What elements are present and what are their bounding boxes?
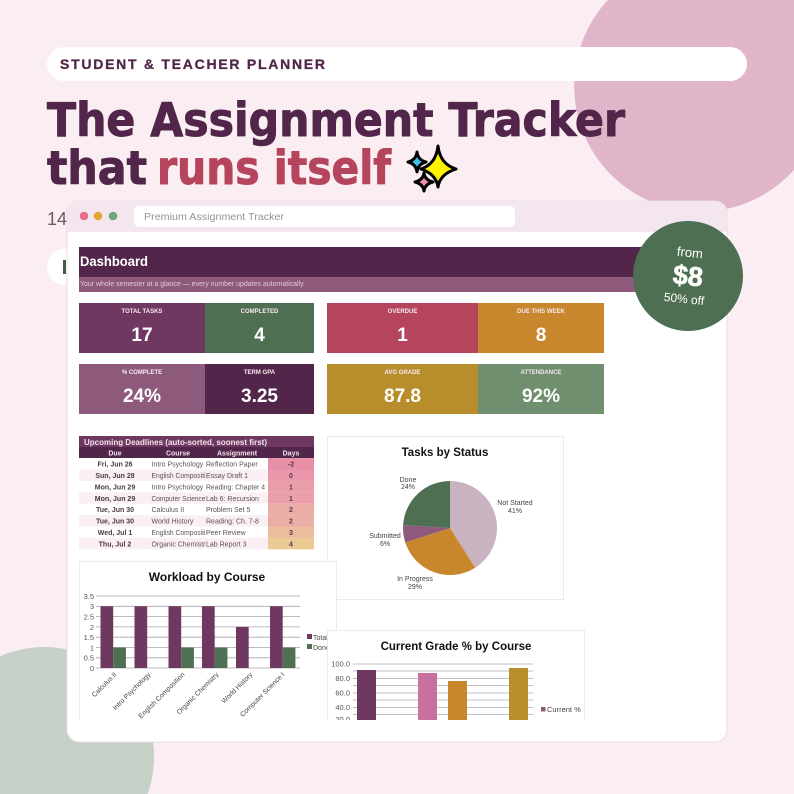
deadlines table: Mon, Jun 29 xyxy=(95,496,135,503)
KPI: average grade xyxy=(327,364,478,414)
bar chart: current grade by course: 100.0 xyxy=(331,660,350,668)
deadlines table: 2 xyxy=(289,507,293,514)
KPI: percent complete: % COMPLETE xyxy=(122,370,162,376)
bar chart: current grade by course: Current % xyxy=(547,705,581,714)
deadlines table: Sun, Jun 28 xyxy=(95,473,135,480)
window toolbar xyxy=(67,201,727,232)
deadlines table: Lab Report 3 xyxy=(206,541,247,548)
pie chart: tasks by status: 6% xyxy=(380,541,390,548)
deadlines table: English Compositi xyxy=(152,530,206,537)
dashboard banner: Your whole semester at a glance — every number updates automatically. xyxy=(80,281,305,288)
deadlines table: Reading: Ch. 7-8 xyxy=(206,519,259,526)
title: runs itself xyxy=(157,141,392,195)
bar chart: workload by course: 0 xyxy=(90,664,94,673)
eyebrow pill xyxy=(47,47,747,81)
KPI: attendance: ATTENDANCE xyxy=(521,370,561,376)
KPI: term GPA: TERM GPA xyxy=(244,370,276,376)
bar chart: workload by course: 0.5 xyxy=(84,654,94,662)
dashboard banner xyxy=(79,247,679,292)
deadlines table: Problem Set 5 xyxy=(206,507,250,514)
partly hidden stat text: 14 xyxy=(47,209,67,229)
deadlines table: World History xyxy=(152,519,194,526)
bar chart: workload by course: Intro Psychology xyxy=(112,671,153,712)
window toolbar: Premium Assignment Tracker xyxy=(144,211,284,223)
deadlines table: Essay Draft 1 xyxy=(206,473,248,480)
KPI: completed xyxy=(205,303,314,353)
deadlines table: 4 xyxy=(289,541,293,548)
deadlines table: Reading: Chapter 4 xyxy=(206,484,265,491)
KPI: completed: COMPLETED xyxy=(241,309,279,315)
price badge: $8 xyxy=(671,260,705,292)
pie chart: tasks by status: Not Started xyxy=(497,500,533,507)
bar chart: workload by course: Workload by Course xyxy=(149,570,266,584)
bar chart: workload by course: Organic Chemistry xyxy=(176,671,221,716)
bar chart: workload by course: 3 xyxy=(90,602,94,611)
title: The Assignment Tracker xyxy=(47,93,625,147)
title xyxy=(47,93,625,195)
deadlines table: Assignment xyxy=(217,450,258,458)
bar chart: workload by course xyxy=(80,562,336,730)
deadlines table xyxy=(79,436,314,549)
KPI: average grade: AVG GRADE xyxy=(385,370,420,376)
bar chart: workload by course: Calculus II xyxy=(91,671,118,699)
KPI: due this week: DUE THIS WEEK xyxy=(517,309,566,315)
KPI: total tasks: TOTAL TASKS xyxy=(122,309,162,315)
icon: sparkles xyxy=(408,146,456,191)
eyebrow pill: STUDENT & TEACHER PLANNER xyxy=(60,56,325,72)
deadlines table: Lab 6: Recursion xyxy=(206,496,259,503)
deadlines table: 1 xyxy=(289,496,293,503)
deadlines table: Upcoming Deadlines (auto-sorted, soonest first) xyxy=(84,437,267,447)
KPI: overdue: 1 xyxy=(397,325,408,346)
KPI: average grade: 87.8 xyxy=(384,386,421,407)
KPI: term GPA: 3.25 xyxy=(241,386,278,407)
pie chart: tasks by status xyxy=(328,436,564,600)
title: that xyxy=(47,141,147,195)
deadlines table: 0 xyxy=(289,473,293,480)
deadlines table: Fri, Jun 26 xyxy=(97,462,133,468)
KPI: attendance: 92% xyxy=(522,386,560,407)
partly hidden button xyxy=(47,249,107,285)
KPI: term GPA xyxy=(205,364,314,414)
bar chart: current grade by course: 40.0 xyxy=(335,703,350,712)
KPI: completed: 4 xyxy=(254,325,265,346)
bar chart: current grade by course: 60.0 xyxy=(335,688,350,698)
KPI: overdue: OVERDUE xyxy=(388,309,417,315)
deadlines table: Intro Psychology xyxy=(152,462,204,468)
deadlines table: English Compositi xyxy=(152,473,206,480)
deadlines table: Computer Science xyxy=(152,496,206,503)
deadlines table: Due xyxy=(108,450,122,458)
pie chart: tasks by status: 29% xyxy=(408,584,422,591)
bar chart: current grade by course xyxy=(327,630,585,720)
KPI: attendance xyxy=(478,364,604,414)
pie chart: tasks by status: In Progress xyxy=(397,576,433,583)
pie chart: tasks by status: Submitted xyxy=(369,533,401,540)
deadlines table: Organic Chemistr xyxy=(152,541,206,548)
decorative circle: top right xyxy=(574,0,794,212)
bar chart: workload by course: English Composition xyxy=(138,671,187,720)
KPI: overdue xyxy=(327,303,478,353)
KPI: due this week: 8 xyxy=(536,325,546,346)
deadlines table: Tue, Jun 30 xyxy=(96,507,134,514)
dashboard banner: Dashboard xyxy=(80,253,148,269)
deadlines table: Wed, Jul 1 xyxy=(98,530,132,537)
deadlines table: Tue, Jun 30 xyxy=(96,519,134,526)
deadlines table: Course xyxy=(166,450,190,458)
bar chart: current grade by course: 20.0 xyxy=(335,715,350,724)
KPI: total tasks: 17 xyxy=(131,325,153,346)
deadlines table: Peer Review xyxy=(206,530,247,537)
deadlines table: Intro Psychology xyxy=(152,484,204,491)
deadlines table: Reflection Paper xyxy=(206,462,258,468)
deadlines table: Mon, Jun 29 xyxy=(95,484,135,491)
deadlines table: Days xyxy=(283,450,299,458)
bar chart: current grade by course: Current Grade % by Course xyxy=(381,641,531,653)
deadlines table: -2 xyxy=(288,462,294,468)
KPI: percent complete xyxy=(79,364,205,414)
bar chart: workload by course: 1.5 xyxy=(84,633,94,642)
deadlines table: Thu, Jul 2 xyxy=(99,541,131,548)
bar chart: workload by course: Computer Science I xyxy=(239,671,286,719)
bar chart: workload by course: 1 xyxy=(90,644,94,652)
KPI: total tasks xyxy=(79,303,205,353)
decorative circle: bottom left xyxy=(0,647,154,794)
deadlines table: Calculus II xyxy=(152,507,184,514)
deadlines table: 3 xyxy=(289,530,293,537)
price badge: from xyxy=(676,244,704,261)
bar chart: workload by course: 3.5 xyxy=(84,592,94,601)
deadlines table: 1 xyxy=(289,484,293,491)
bar chart: current grade by course: 80.0 xyxy=(335,674,350,683)
pie chart: tasks by status: 24% xyxy=(401,484,415,491)
deadlines table: 2 xyxy=(289,519,293,526)
bar chart: workload by course: Done xyxy=(313,645,330,652)
price badge: 50% off xyxy=(663,290,706,308)
bar chart: workload by course: Total xyxy=(313,635,328,642)
browser window xyxy=(67,201,727,742)
KPI: percent complete: 24% xyxy=(123,386,161,407)
price badge xyxy=(633,221,743,331)
bar chart: workload by course: 2 xyxy=(90,623,94,632)
pie chart: tasks by status: 41% xyxy=(508,508,522,515)
bar chart: workload by course: 2.5 xyxy=(84,612,94,622)
pie chart: tasks by status: Tasks by Status xyxy=(402,447,488,459)
pie chart: tasks by status: Done xyxy=(400,477,416,484)
KPI: due this week xyxy=(478,303,604,353)
bar chart: workload by course: World History xyxy=(221,671,255,705)
